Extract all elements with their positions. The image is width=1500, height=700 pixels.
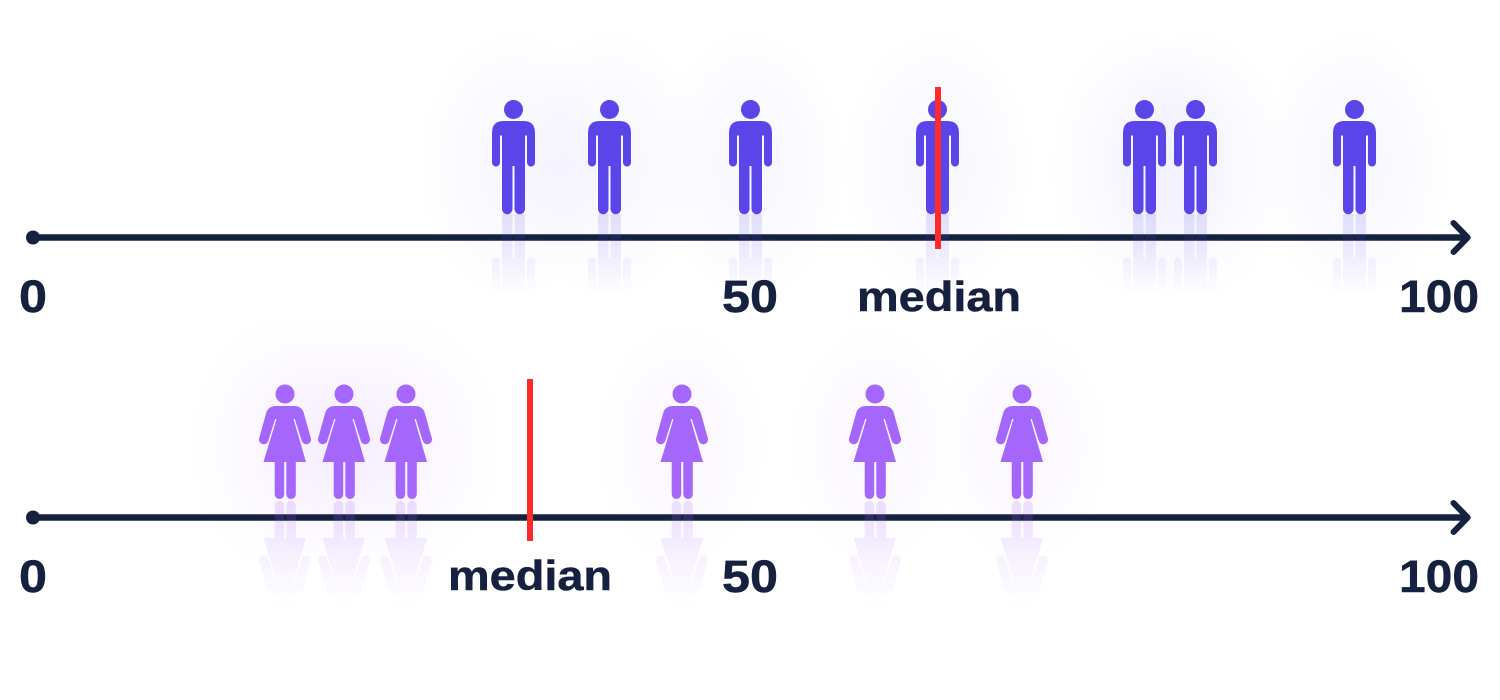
label 50: 50 xyxy=(722,551,778,602)
glow behind men xyxy=(418,30,1450,300)
reflections of men xyxy=(492,214,1376,272)
label median: median xyxy=(448,552,612,599)
label 100: 100 xyxy=(1399,271,1479,322)
axis arrow 0 to 100 xyxy=(26,223,1468,252)
reflections of women xyxy=(259,501,1048,578)
median marker xyxy=(527,379,533,541)
label median: median xyxy=(857,273,1021,320)
label 100: 100 xyxy=(1399,551,1479,602)
icons: six women xyxy=(259,384,1048,499)
label 50: 50 xyxy=(722,271,778,322)
label 0: 0 xyxy=(19,271,47,322)
icons: seven men xyxy=(492,100,1376,214)
glow behind women xyxy=(190,315,1107,575)
axis arrow 0 to 100 xyxy=(26,503,1468,532)
panel: bottom scale (women) xyxy=(20,362,1478,593)
panel: top scale (men) xyxy=(20,81,1478,313)
label 0: 0 xyxy=(19,551,47,602)
median marker xyxy=(935,87,941,249)
